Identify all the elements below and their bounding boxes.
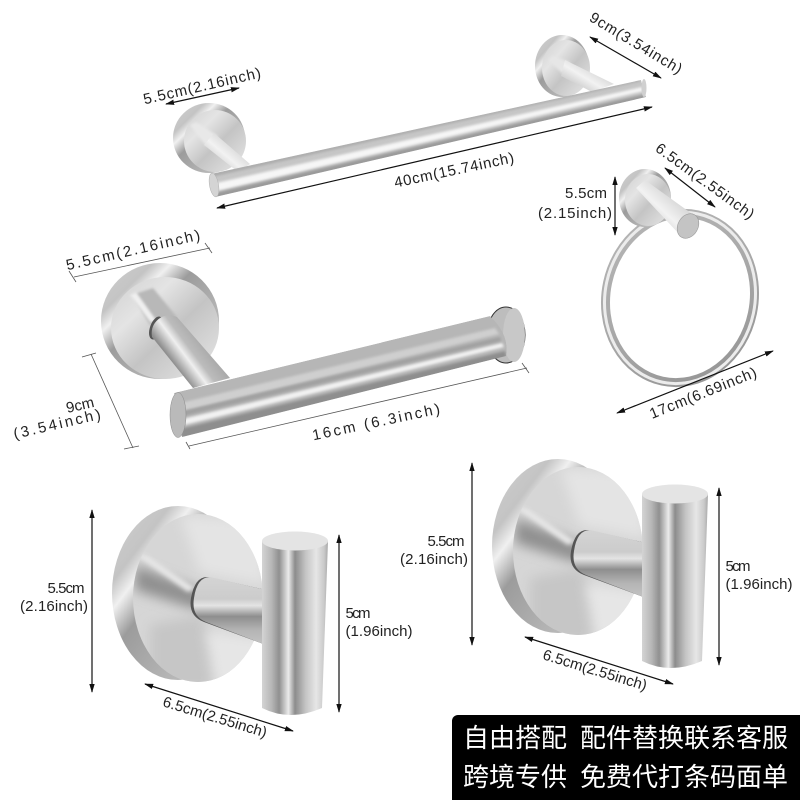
dimension: ring diameter: 17cm(6.69inch) <box>647 364 759 423</box>
towel bar product <box>173 35 646 199</box>
dimension: holder depth: (3.54inch) <box>12 406 102 443</box>
dimension: holder length <box>186 363 529 449</box>
towel ring product <box>589 169 771 398</box>
banner line 1: 配件替换联系客服 <box>580 723 788 753</box>
dimension: ring plate height: 5.5cm <box>565 185 607 202</box>
panel: towel ring <box>538 140 773 423</box>
banner line 2: 跨境专供 <box>463 762 567 792</box>
dimension: hook plate height: (2.16inch) <box>20 598 88 615</box>
toilet paper holder product <box>101 263 525 439</box>
dimension: hook depth: 6.5cm(2.55inch) <box>161 694 269 741</box>
dimension: holder length: 16cm (6.3inch) <box>311 401 441 444</box>
dimension: towel plate diameter: 5.5cm(2.16inch) <box>142 65 262 108</box>
banner line 2: 免费代打条码面单 <box>580 762 788 792</box>
panel: right robe hook <box>400 459 792 694</box>
callout: black service banner <box>452 715 800 800</box>
dimension: hook depth: 6.5cm(2.55inch) <box>541 647 649 694</box>
dimension: hook plate height: (2.16inch) <box>400 551 468 568</box>
dimension: hook height: (1.96inch) <box>346 623 412 640</box>
dimension: towel bar depth: 9cm(3.54inch) <box>586 9 685 78</box>
dimension: ring depth: 6.5cm(2.55inch) <box>652 140 757 223</box>
dimension: hook depth <box>525 637 673 694</box>
dimension: hook height <box>339 535 412 712</box>
dimension: holder depth: 9cm <box>64 394 96 417</box>
dimension: ring diameter <box>617 351 773 423</box>
dimension: hook depth <box>145 684 293 741</box>
dimension: hook plate height <box>20 510 92 692</box>
panel: toilet paper holder <box>12 227 529 449</box>
dimension: towel bar length: 40cm(15.74inch) <box>393 149 516 191</box>
dimension: hook plate height: 5.5cm <box>428 533 464 550</box>
dimension: hook height <box>719 488 792 665</box>
dimension: ring plate height: (2.15inch) <box>538 205 612 222</box>
dimension: towel bar length <box>217 107 652 208</box>
dimension: hook plate height: 5.5cm <box>48 580 84 597</box>
dimension: holder depth <box>12 353 139 449</box>
dimension: ring plate height <box>538 177 615 235</box>
dimension: hook height: 5cm <box>726 558 750 575</box>
banner line 1: 自由搭配 <box>463 723 567 753</box>
panel: towel bar <box>142 9 685 208</box>
dimension: holder plate diameter: 5.5cm(2.16inch) <box>64 227 202 274</box>
left robe hook product <box>112 506 328 715</box>
dimension: hook height: (1.96inch) <box>726 576 792 593</box>
dimension: hook height: 5cm <box>346 605 370 622</box>
dimension: hook plate height <box>400 463 472 645</box>
right robe hook product <box>492 459 708 668</box>
panel: left robe hook <box>20 506 412 741</box>
